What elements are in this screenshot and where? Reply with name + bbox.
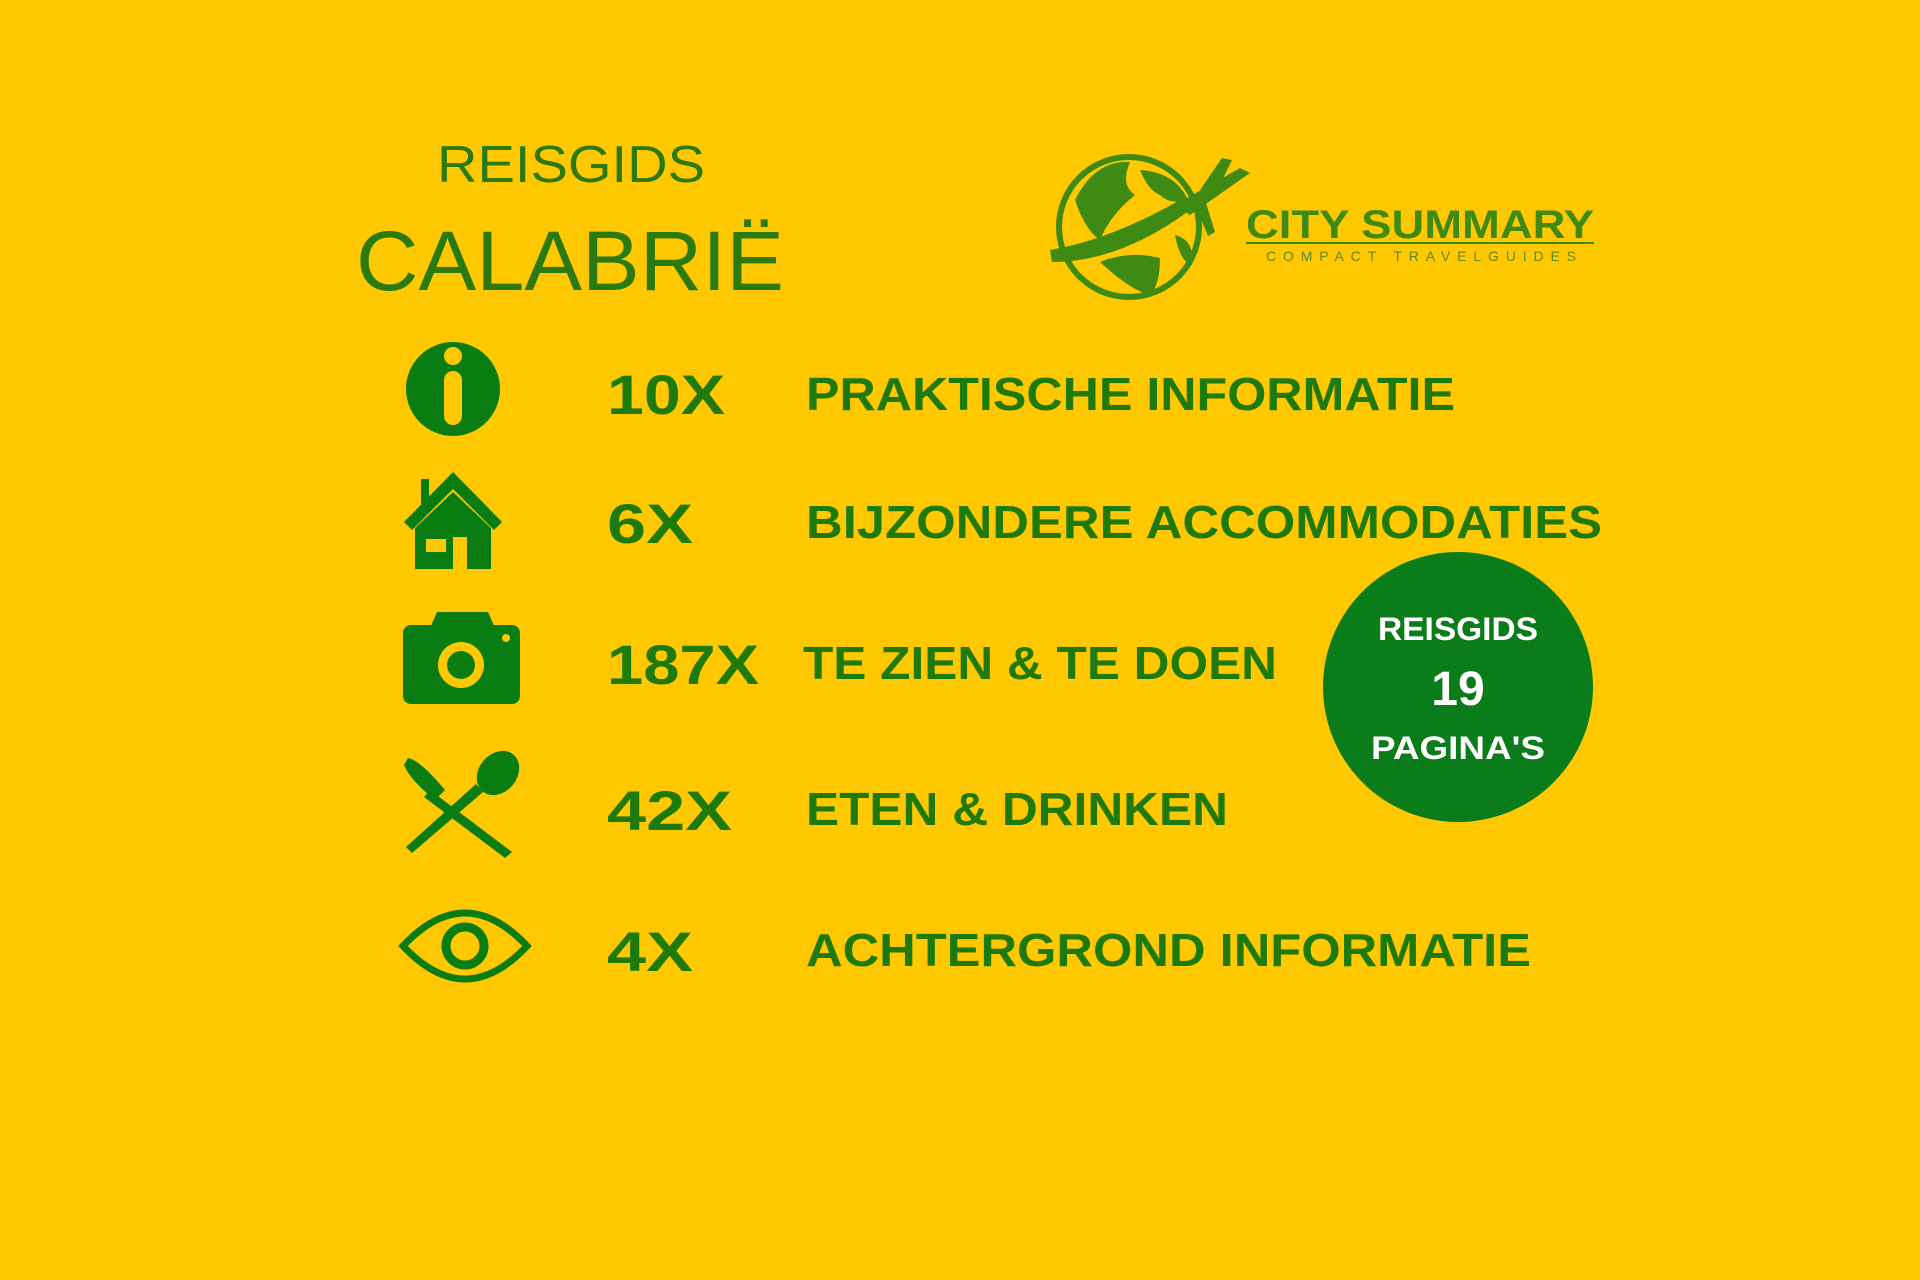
logo text: CITY SUMMARY	[1246, 203, 1594, 247]
icon: camera	[403, 612, 520, 704]
icon: info	[406, 342, 500, 436]
row: eten & drinken: ETEN & DRINKEN	[806, 783, 1228, 835]
row: te zien & te doen: TE ZIEN & TE DOEN	[803, 637, 1277, 689]
logo: city summary	[1050, 157, 1594, 297]
row: praktische informatie	[406, 342, 1455, 436]
logo text: COMPACT TRAVELGUIDES	[1266, 248, 1576, 264]
row: eten & drinken: 42X	[607, 779, 732, 842]
row: achtergrond informatie: ACHTERGROND INFORMATIE	[806, 924, 1531, 976]
row: achtergrond informatie: 4X	[607, 920, 693, 983]
icon: eye	[403, 913, 527, 979]
row: accommodaties: BIJZONDERE ACCOMMODATIES	[806, 496, 1602, 548]
badge: 19 pagina's: 19	[1431, 663, 1485, 716]
title: reisgids: REISGIDS	[437, 136, 705, 194]
row: accommodaties: 6X	[607, 492, 693, 555]
row: praktische informatie: 10X	[607, 363, 725, 426]
badge: 19 pagina's	[1323, 552, 1593, 822]
logo text	[1246, 203, 1594, 264]
badge: 19 pagina's: REISGIDS	[1378, 611, 1538, 647]
badge: 19 pagina's: PAGINA'S	[1371, 730, 1545, 766]
row: praktische informatie: PRAKTISCHE INFORMATIE	[806, 368, 1455, 420]
icon: knife and spoon	[404, 742, 528, 858]
row: accommodaties	[404, 472, 1602, 569]
row: te zien & te doen	[403, 612, 1277, 704]
icon: house	[404, 472, 502, 569]
icon: globe with plane	[1050, 157, 1250, 297]
title: calabrie: CALABRIË	[356, 214, 784, 308]
row: eten & drinken	[404, 742, 1228, 858]
row: te zien & te doen: 187X	[607, 633, 759, 696]
row: achtergrond informatie	[403, 913, 1531, 983]
